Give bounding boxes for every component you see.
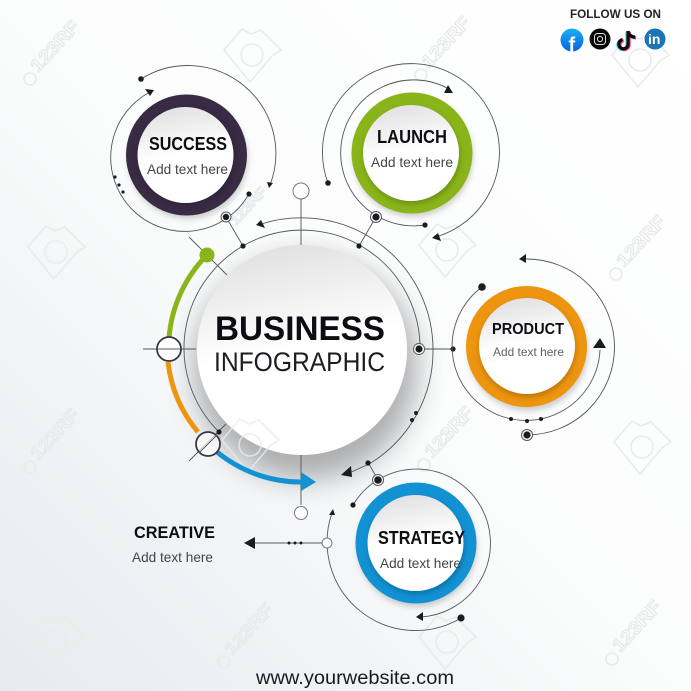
launch heading: LAUNCH [377,127,447,147]
watermark on disc shadow: 123RF [226,183,270,228]
launch text: Add text here [371,154,453,170]
small open circle: top [293,183,309,199]
watermarks: 123RF [608,597,665,656]
strategy ring [356,482,477,607]
watermarks: 123RF [417,13,474,72]
panel: strategy [327,469,490,631]
success connector arcs [111,66,276,231]
creative text: Add text here [132,549,213,565]
success text: Add text here [147,161,228,177]
strategy heading: STRATEGY [378,528,465,548]
watermarks: 123RF [26,17,83,76]
panel: product [452,254,615,440]
title: INFOGRAPHIC [214,347,385,377]
icon: tiktok [618,31,636,50]
panel: launch [322,64,499,241]
product heading: PRODUCT [492,321,564,338]
central connector rings [143,199,456,505]
panel: creative [132,523,215,565]
panel: success [111,66,276,231]
social heading: FOLLOW US ON [570,7,661,21]
creative heading: CREATIVE [134,523,215,542]
website url: www.yourwebsite.com [255,668,454,689]
icon: instagram [590,28,610,50]
strategy text: Add text here [380,555,461,571]
success heading: SUCCESS [149,134,227,154]
launch connector arcs [322,64,499,241]
icon: facebook [560,28,584,56]
title [214,310,385,377]
icon: linkedin: in [648,31,660,47]
success ring [126,94,248,219]
title: BUSINESS [215,310,385,348]
arrow: centre ring bottom [341,466,352,477]
icon: linkedin [644,28,666,50]
central disc shadow [194,256,418,480]
watermark on disc shadow [222,183,279,472]
strategy connector arcs [327,469,490,631]
launch ring [352,92,473,217]
product connector arcs [452,254,615,440]
product ring [466,286,588,411]
watermarks: 123RF [420,403,477,462]
coloured progress arc [157,248,316,491]
icon: facebook: f [568,34,576,56]
watermarks: 123RF [612,212,669,271]
arrow: centre ring top [256,220,265,228]
creative connector arrow [244,537,332,549]
central white disc [197,245,407,455]
product text: Add text here [493,345,564,359]
watermarks: 123RF [26,405,83,464]
watermarks: 123RF [220,600,277,659]
small open circle: bottom [294,506,308,520]
panel: central disc [194,245,418,480]
